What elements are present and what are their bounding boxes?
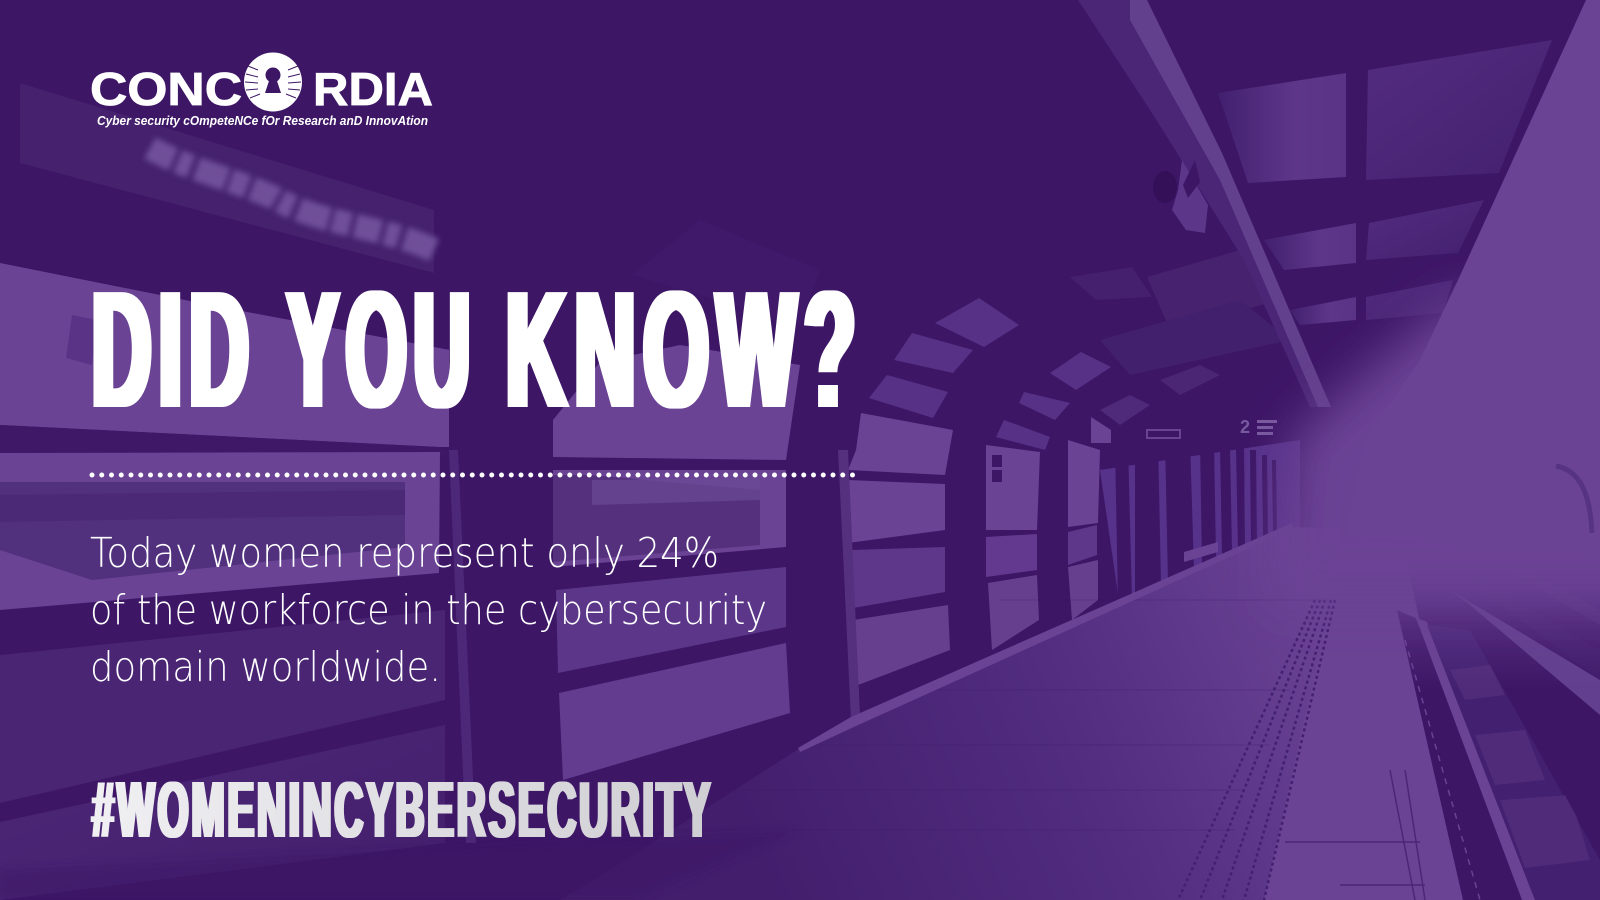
- left window landscape: [0, 482, 405, 580]
- railway tracks: [1397, 545, 1600, 900]
- logo: Concordia: [90, 52, 433, 128]
- window five: [1068, 417, 1111, 620]
- window four: [986, 445, 1040, 650]
- camera: [1153, 160, 1208, 233]
- station sign: [20, 83, 434, 273]
- heading: DID: [92, 256, 256, 443]
- pillar one: [449, 335, 553, 850]
- heading: YOU: [287, 256, 477, 443]
- tactile paving strips: [1178, 600, 1335, 900]
- ceiling panel faint: [632, 220, 820, 325]
- station marker: 2: [1240, 417, 1250, 437]
- body text: [90, 529, 767, 691]
- left lower panel: [0, 610, 445, 803]
- wall signs: [66, 315, 97, 365]
- window two view: [553, 470, 786, 567]
- platform edge strip: [798, 523, 1294, 752]
- hashtag: #WOMENINCYBERSECURITY: [92, 766, 713, 855]
- station marker: [1147, 417, 1277, 438]
- logo tagline: Cyber security cOmpeteNCe fOr Research anD InnovAtion: [97, 114, 428, 128]
- far tunnel wall: [1100, 440, 1300, 608]
- body text: domain worldwide.: [90, 643, 441, 691]
- distant arch: [1556, 466, 1592, 533]
- pipe along ceiling: [1078, 0, 1331, 407]
- body text: of the workforce in the cybersecurity: [90, 586, 767, 634]
- roof glass panels: [1070, 40, 1552, 375]
- logo globe with keyhole: [244, 52, 302, 112]
- floor tile lines: [670, 600, 1330, 830]
- logo wordmark right: RDIA: [313, 63, 433, 115]
- left wall light panel: [0, 263, 450, 447]
- platform joints: [1285, 770, 1425, 900]
- arch block panels: [869, 298, 1220, 450]
- dark window rail: [0, 425, 449, 455]
- left window view: [0, 452, 440, 610]
- track haze: [1380, 530, 1600, 690]
- window three: [838, 413, 953, 720]
- window two upper: [553, 345, 800, 460]
- far tunnel ribs: [1115, 440, 1277, 605]
- body text: Today women represent only 24%: [90, 529, 719, 577]
- window two panels: [556, 567, 786, 673]
- heading: [92, 256, 863, 444]
- bench: [1184, 542, 1218, 562]
- dotted divider: [92, 472, 853, 478]
- bottom vignette: [0, 830, 800, 900]
- fog and sky: [1275, 0, 1600, 600]
- platform light side: [1264, 540, 1463, 900]
- logo wordmark left: CONC: [90, 63, 242, 115]
- platform floor: [560, 527, 1480, 900]
- track sleepers: [1450, 665, 1590, 868]
- heading: KNOW?: [506, 257, 863, 444]
- sign blurred lettering: [150, 148, 434, 250]
- pillar one light edge: [449, 450, 476, 843]
